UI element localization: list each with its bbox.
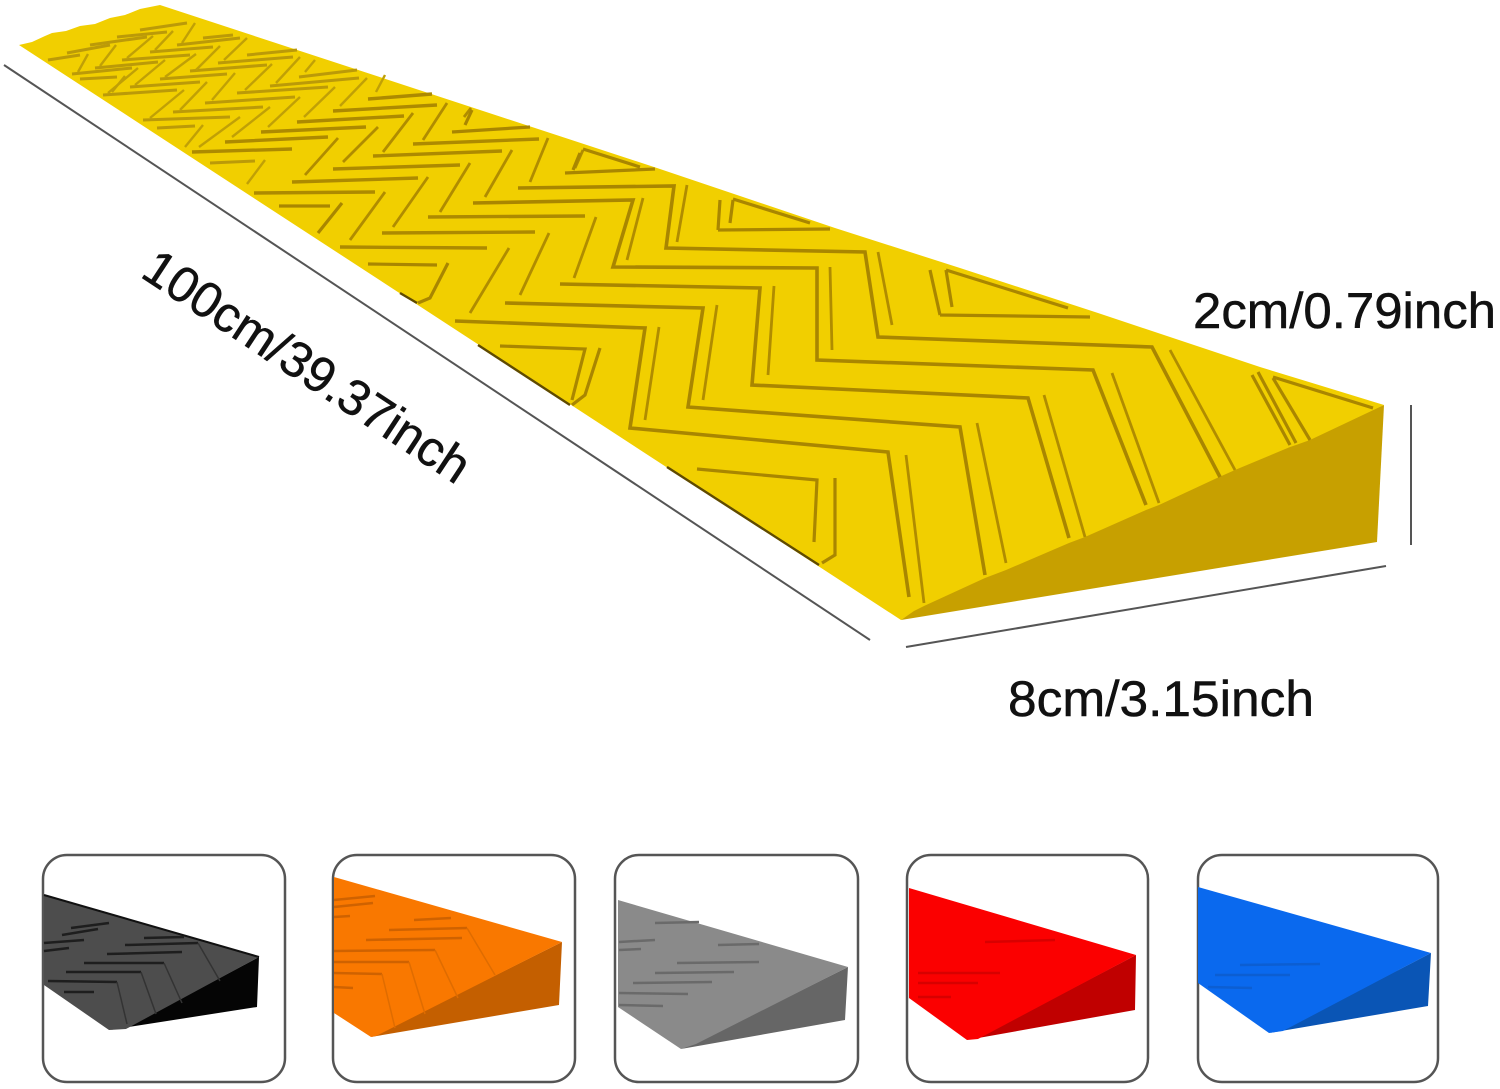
ramp top surface	[19, 5, 1384, 620]
color swatch: black	[43, 855, 285, 1082]
dimension line: height	[1410, 405, 1412, 545]
label: height: 2cm/0.79inch	[1193, 283, 1496, 339]
middle chevron ridges	[192, 94, 585, 248]
main yellow ramp	[19, 5, 1384, 620]
color swatch: gray	[615, 855, 858, 1082]
color swatch: blue	[1198, 855, 1438, 1082]
color swatch: red	[907, 855, 1148, 1082]
top-edge triangle marks	[452, 110, 1373, 445]
secondary parallel arms	[305, 103, 1235, 603]
ramp side face	[901, 405, 1384, 620]
low-edge shadow	[400, 293, 819, 565]
label: length: 100cm/39.37inch	[133, 238, 481, 494]
far chevron ridges	[48, 23, 359, 163]
dimension line: width	[906, 566, 1386, 647]
near chevron zigzags	[455, 186, 1220, 597]
label: width: 8cm/3.15inch	[1008, 671, 1314, 727]
far diagonal arms	[78, 23, 385, 184]
color swatch: orange	[333, 855, 575, 1082]
dimension line: length	[4, 65, 870, 640]
low-edge triangle marks	[279, 203, 835, 563]
